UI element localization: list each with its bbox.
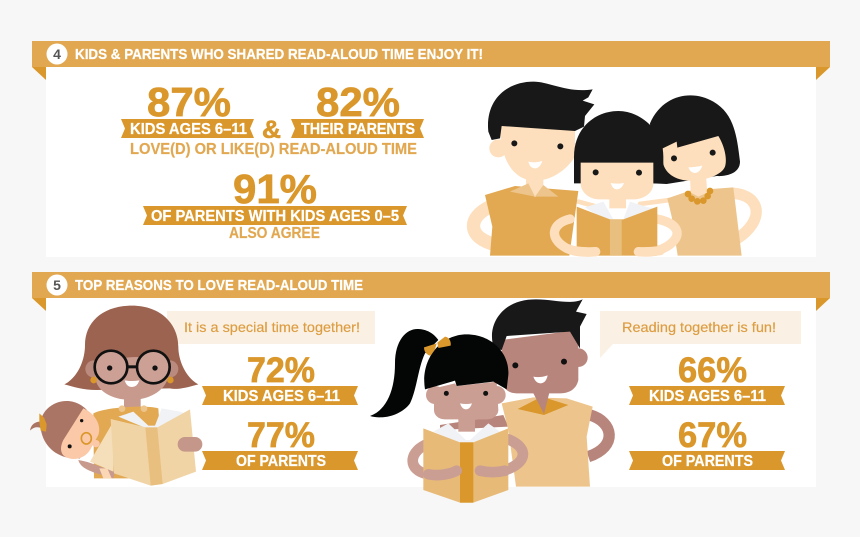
stat: 87 percent of kids ages 6-11: [121, 79, 254, 138]
stat: 66 percent kids ages 6-11: 66%: [678, 351, 747, 390]
stat: 67 percent of parents: OF PARENTS: [662, 453, 753, 470]
stat: 91 percent of parents with kids ages 0-5: [143, 166, 407, 225]
stat: 82 percent of their parents: THEIR PARENTS: [301, 121, 415, 138]
speech bubble: reading together is fun: Reading together is fun!: [622, 319, 776, 335]
heading banner: section 5: 5: [53, 277, 61, 293]
heading banner: section 4: KIDS & PARENTS WHO SHARED READ-ALOUD TIME ENJOY IT!: [75, 46, 483, 63]
illustration: mother reading to baby: [30, 306, 202, 486]
speech bubble: reading together is fun: [600, 311, 801, 358]
stat: 72 percent kids ages 6-11: 72%: [247, 351, 315, 390]
stat: 72 percent kids ages 6-11: [202, 351, 358, 405]
stat: 72 percent kids ages 6-11: KIDS AGES 6–11: [223, 388, 340, 405]
illustration: father and daughter reading: [370, 299, 609, 503]
stat: 77 percent of parents: OF PARENTS: [236, 453, 326, 470]
speech bubble: it is a special time together: It is a special time together!: [184, 319, 360, 335]
stat: 91 percent of parents with kids ages 0-5: OF PARENTS WITH KIDS AGES 0–5: [151, 208, 399, 225]
icon: hair bow: [424, 337, 451, 356]
stat: 67 percent of parents: 67%: [678, 416, 747, 455]
stat: 77 percent of parents: [202, 416, 358, 470]
heading banner: section 4: [32, 41, 830, 80]
heading banner: section 4: 4: [53, 46, 61, 62]
panel: section 4 kids and parents enjoy it: [32, 41, 830, 257]
stat: 82 percent of their parents: [291, 79, 424, 138]
heading banner: section 5: TOP REASONS TO LOVE READ-ALOUD TIME: [75, 277, 363, 294]
text: also agree: ALSO AGREE: [229, 225, 320, 242]
text: loved or liked read-aloud time: LOVE(D) OR LIKE(D) READ-ALOUD TIME: [130, 141, 417, 158]
stat: 91 percent of parents with kids ages 0-5: 91%: [233, 166, 317, 212]
heading banner: section 5: [32, 272, 830, 311]
stat: 66 percent kids ages 6-11: KIDS AGES 6–11: [649, 388, 766, 405]
stat: 87 percent of kids ages 6-11: 87%: [147, 79, 231, 125]
stat: 82 percent of their parents: 82%: [316, 79, 400, 125]
stat: 77 percent of parents: 77%: [247, 416, 315, 455]
illustration: family of three reading: [473, 82, 756, 256]
stat: 67 percent of parents: [629, 416, 785, 470]
stat: 66 percent kids ages 6-11: [629, 351, 785, 405]
ampersand: &: [262, 116, 281, 144]
panel: section 5 top reasons: [30, 272, 830, 503]
stat: 87 percent of kids ages 6-11: KIDS AGES 6–11: [130, 121, 247, 138]
speech bubble: it is a special time together: [167, 311, 375, 344]
